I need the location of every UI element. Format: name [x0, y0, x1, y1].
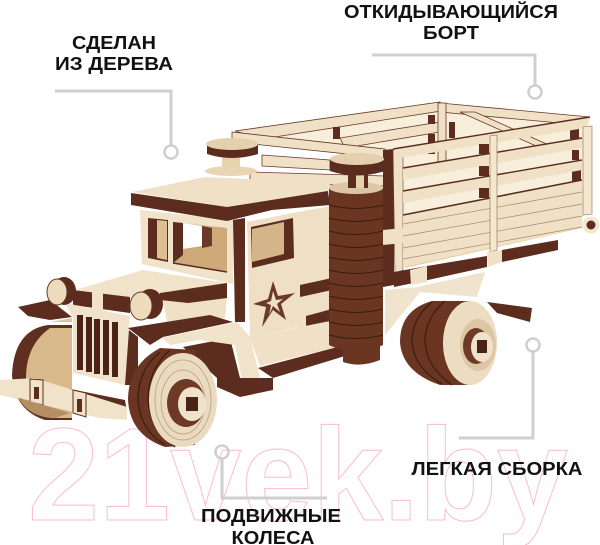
door window	[251, 218, 294, 268]
star emblem	[253, 281, 295, 327]
rear ring	[584, 218, 598, 232]
marker	[164, 146, 178, 158]
left front wheel	[12, 325, 72, 420]
label: БОРТ	[423, 23, 479, 43]
right front fender	[128, 315, 273, 397]
leader line	[55, 91, 171, 145]
near side slatted wall	[383, 117, 598, 287]
cab	[131, 177, 345, 378]
spare wheel cylinder	[329, 153, 385, 365]
middle post	[490, 135, 497, 252]
rear post	[583, 126, 592, 215]
right window	[173, 222, 227, 272]
hood	[73, 270, 227, 322]
label: ОТКИДЫВАЮЩИЙСЯ	[344, 1, 558, 22]
callout: folding side	[344, 1, 558, 98]
label: ЛЕГКАЯ СБОРКА	[412, 459, 582, 479]
third rail	[403, 160, 582, 203]
rear fender bar	[487, 302, 532, 322]
lower solid panel	[403, 180, 582, 267]
callout: easy assembly	[412, 338, 582, 479]
front bumper	[0, 378, 127, 420]
cab side rear section	[297, 206, 332, 330]
marker	[526, 338, 540, 352]
watermark: 21vek.by	[28, 401, 568, 545]
front post	[393, 150, 403, 274]
far posts	[333, 115, 581, 181]
far side spare disc	[205, 138, 258, 176]
far side rails	[235, 102, 590, 170]
running board	[258, 345, 345, 378]
label: СДЕЛАН	[72, 33, 156, 53]
left window	[148, 218, 168, 262]
label: ПОДВИЖНЫЕ	[201, 506, 341, 526]
marker	[528, 86, 542, 98]
callout: movable wheels	[201, 446, 341, 545]
front end rails	[232, 132, 385, 186]
leader line	[372, 55, 535, 85]
roof edge	[131, 191, 330, 221]
top rail	[393, 117, 590, 158]
headlights	[47, 277, 163, 320]
lower bed edge	[394, 256, 487, 287]
leader line	[222, 459, 327, 498]
door	[247, 212, 298, 338]
second rail	[403, 138, 582, 180]
callout: made of wood	[55, 33, 178, 158]
leader line	[459, 352, 533, 438]
door pillar	[233, 218, 245, 322]
cargo bed	[232, 102, 598, 335]
door lower panel	[250, 318, 345, 366]
roof top	[132, 177, 330, 207]
rear wheel	[400, 301, 497, 385]
front corner strip	[383, 149, 394, 287]
post blocks	[479, 144, 489, 198]
truck illustration	[0, 102, 598, 447]
marker	[216, 446, 228, 458]
bed interior	[240, 105, 590, 268]
grille	[65, 303, 138, 385]
cab front wall	[140, 210, 233, 284]
right front wheel	[128, 348, 217, 447]
label: ИЗ ДЕРЕВА	[55, 54, 173, 74]
left fender	[18, 300, 72, 322]
under chassis	[385, 272, 485, 335]
